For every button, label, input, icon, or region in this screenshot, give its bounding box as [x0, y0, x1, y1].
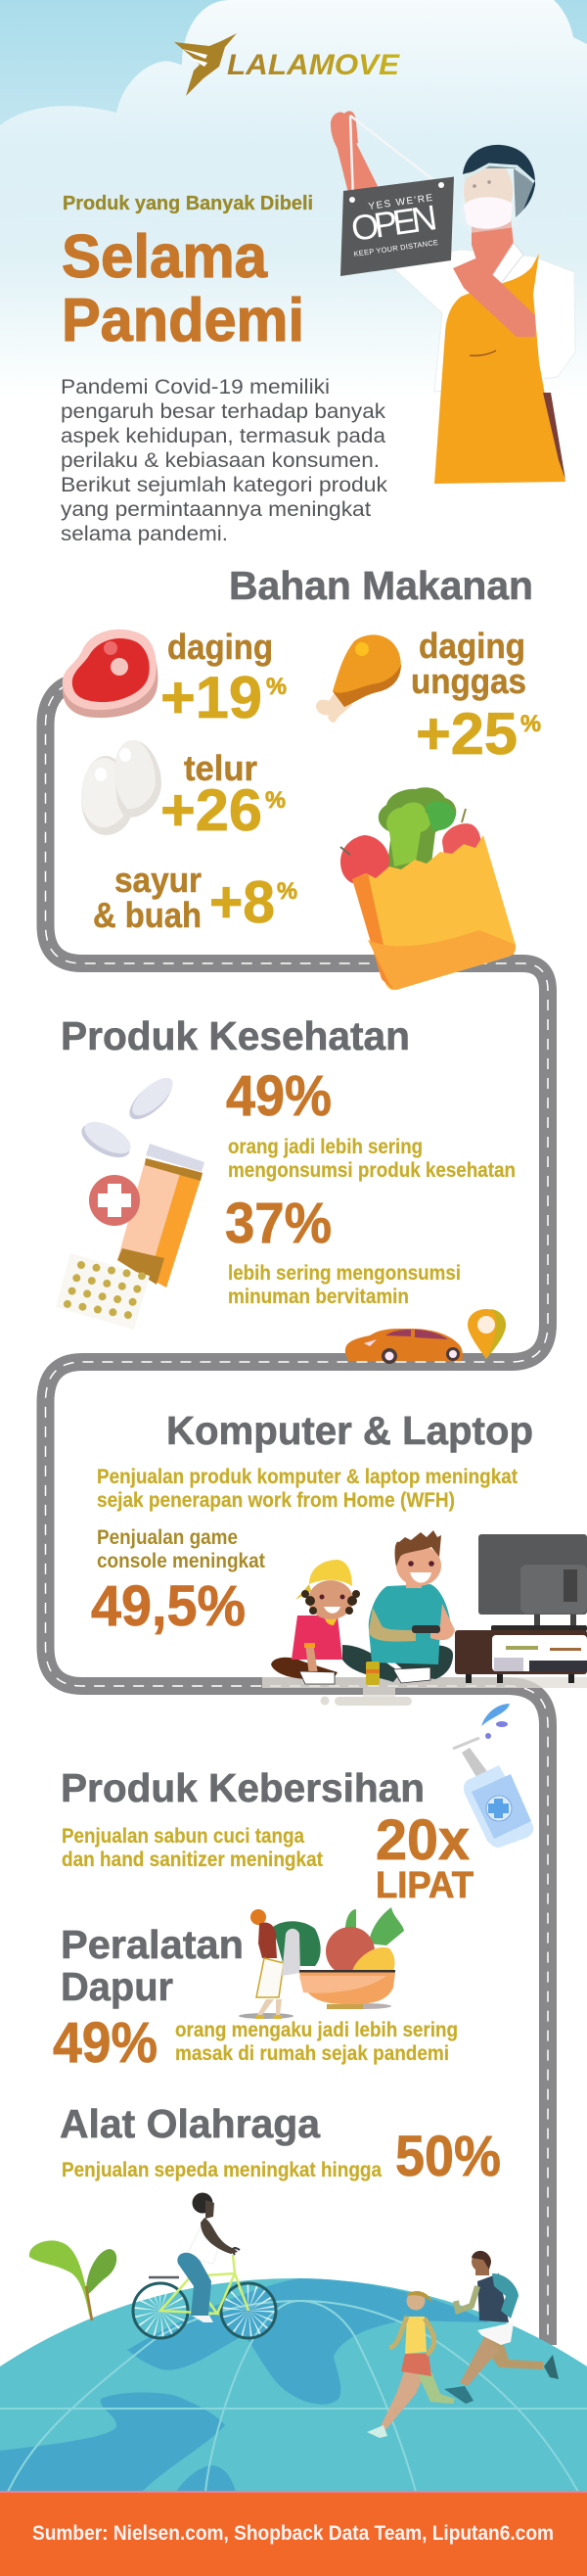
text: masak di rumah [175, 2019, 458, 2065]
intro text: perilaku & kebiasaan konsumen. [61, 449, 380, 472]
panel: produk kesehatan [56, 1064, 516, 1364]
intro text [61, 376, 388, 545]
icon: grocery bag [340, 787, 516, 990]
background sky [0, 0, 587, 431]
text: minuman bervitamin: minuman bervitamin [228, 1286, 409, 1308]
text: penjualan game console [97, 1526, 265, 1572]
stat: 20x lipat [376, 1808, 474, 1906]
intro text: pengaruh besar terhadap banyak [61, 400, 386, 423]
raised arm [336, 139, 378, 201]
text: minuman bervitamin: lebih sering mengonsumsi [228, 1262, 461, 1285]
stat: daging: % [266, 674, 287, 700]
stat: 50 percent: 50% [395, 2125, 501, 2188]
text: penjualan game console: Penjualan game [97, 1526, 238, 1549]
icon: chicken drumstick [316, 634, 401, 723]
icon: TV and console [455, 1534, 587, 1683]
road [45, 684, 548, 2345]
head [464, 160, 513, 222]
illustration: runner man [444, 2251, 559, 2404]
intro text: aspek kehidupan, termasuk pada [61, 425, 385, 447]
icon: car [345, 1329, 463, 1364]
heading: Produk Kesehatan: Produk Kesehatan [61, 1013, 410, 1058]
stat: telur: +26 [160, 777, 262, 843]
vegetables [345, 1907, 404, 1945]
illustration: runner woman [367, 2291, 455, 2438]
intro text: yang permintaannya meningkat [61, 498, 371, 521]
text: penjualan sabun: dan hand sanitizer meningkat [62, 1849, 323, 1871]
heading: Peralatan Dapur: Dapur [61, 1964, 173, 2009]
collar [492, 243, 523, 286]
stat: telur [160, 748, 286, 843]
icon: eggs [81, 740, 161, 835]
text: penjualan game console: console meningkat [97, 1550, 265, 1572]
stat: daging unggas: unggas [411, 661, 526, 701]
subtitle: Produk yang Banyak Dibeli [63, 193, 313, 214]
stat: 20x lipat: 20x [376, 1808, 470, 1872]
icon: pills, bottle and blister [56, 1071, 204, 1330]
text: penjualan komputer: Penjualan produk komputer & laptop meningkat [97, 1466, 518, 1488]
stat: 37 percent: 37% [225, 1192, 332, 1255]
bag body [352, 835, 516, 990]
heading: Produk Kebersihan: Produk Kebersihan [61, 1765, 425, 1810]
icon: hand sanitizer [453, 1704, 533, 1848]
logo wordmark: LALAMOVE [227, 49, 400, 81]
icon: hummingbird [174, 33, 237, 96]
intro text: Pandemi Covid-19 memiliki [61, 376, 330, 398]
stat: 49 percent masak: 49% [53, 2011, 158, 2075]
stat: telur: telur [184, 748, 257, 788]
heading: Alat Olahraga: Alat Olahraga [60, 2101, 321, 2146]
chef figure [250, 1909, 266, 1925]
illustration: girl gaming [271, 1560, 360, 1684]
illustration: shopkeeper with open sign [331, 111, 575, 484]
heading: Peralatan Dapur [61, 1922, 244, 2009]
text: penjualan sabun [62, 1825, 323, 1871]
intro text: Berikut sejumlah kategori produk [61, 474, 388, 496]
forearm and hand [453, 258, 535, 337]
stat: daging [160, 627, 287, 730]
illustration: shopkeeper with open sign: OPEN [348, 197, 439, 249]
stat: sayur dan buah: & buah [93, 895, 202, 935]
shirt [389, 250, 575, 392]
stat: daging unggas: % [520, 711, 541, 737]
open sign [340, 176, 454, 276]
stat: daging unggas: +25 [416, 701, 518, 767]
stat: daging: +19 [160, 665, 262, 730]
neck [472, 217, 514, 284]
stat: daging unggas [411, 626, 541, 767]
text: penjualan komputer [97, 1466, 518, 1512]
footer band [0, 2491, 587, 2576]
stat: daging: daging [167, 627, 273, 667]
text: masak di rumah: orang mengaku jadi lebih sering [175, 2019, 458, 2041]
illustration: cyclist [133, 2193, 276, 2338]
broccoli [379, 787, 456, 871]
icon: soda can [366, 1662, 380, 1685]
panel: bahan makanan [63, 626, 541, 990]
title: Pandemi [62, 287, 304, 354]
stat: sayur dan buah: % [277, 878, 297, 905]
bowl [299, 1972, 395, 2004]
apples [340, 835, 389, 883]
text: lebih sering produk kesehatan: orang jadi lebih sering [228, 1136, 423, 1158]
heading: Komputer & Laptop: Komputer & Laptop [166, 1408, 533, 1453]
text: masak di rumah: masak di rumah sejak pandemi [175, 2042, 449, 2065]
text: lebih sering produk kesehatan: mengonsumsi produk kesehatan [228, 1159, 516, 1182]
stat: 20x lipat: LIPAT [376, 1865, 474, 1906]
stat: sayur dan buah [93, 860, 297, 935]
panel: komputer dan laptop [91, 1466, 587, 1706]
apron [434, 254, 565, 484]
stat: daging unggas: daging [419, 626, 525, 666]
heading: Peralatan Dapur: Peralatan [61, 1922, 244, 1967]
illustration: shopkeeper with open sign: YES WE'RE [368, 193, 433, 212]
stat: sayur dan buah: +8 [209, 869, 275, 935]
kale [273, 1921, 321, 1966]
face shield [458, 164, 534, 233]
illustration: shopkeeper with open sign: KEEP YOUR DISTANCE [353, 238, 438, 258]
illustration: chef and bowl [239, 1907, 404, 2019]
text: penjualan komputer: sejak penerapan work from Home (WFH) [97, 1489, 455, 1512]
floor shadow [262, 1677, 587, 1706]
stat: sayur dan buah: sayur [114, 860, 202, 900]
title [62, 223, 304, 354]
stat: telur: % [265, 787, 286, 814]
sign strings [350, 116, 441, 201]
icon: location pin [468, 1309, 506, 1359]
stat: 49 percent: 49% [226, 1064, 332, 1128]
stat: 49,5 percent: 49,5% [91, 1574, 246, 1638]
intro text: selama pandemi. [61, 523, 228, 545]
title: Selama [62, 223, 267, 291]
icon: meat [63, 630, 158, 718]
illustration: plant [29, 2240, 116, 2320]
text: lebih sering produk kesehatan [228, 1136, 516, 1182]
pepper shaker [282, 1929, 300, 1976]
text: penjualan sepeda: Penjualan sepeda meningkat hingga [62, 2159, 382, 2181]
text: minuman bervitamin [228, 1262, 461, 1308]
heading: Bahan Makanan: Bahan Makanan [229, 563, 533, 608]
mask [464, 197, 513, 229]
text: penjualan sabun: Penjualan sabun cuci tanga [62, 1825, 304, 1848]
logo: Lalamove [174, 33, 400, 96]
illustration: boy gaming [342, 1530, 455, 1683]
illustration: globe [0, 2278, 587, 2492]
